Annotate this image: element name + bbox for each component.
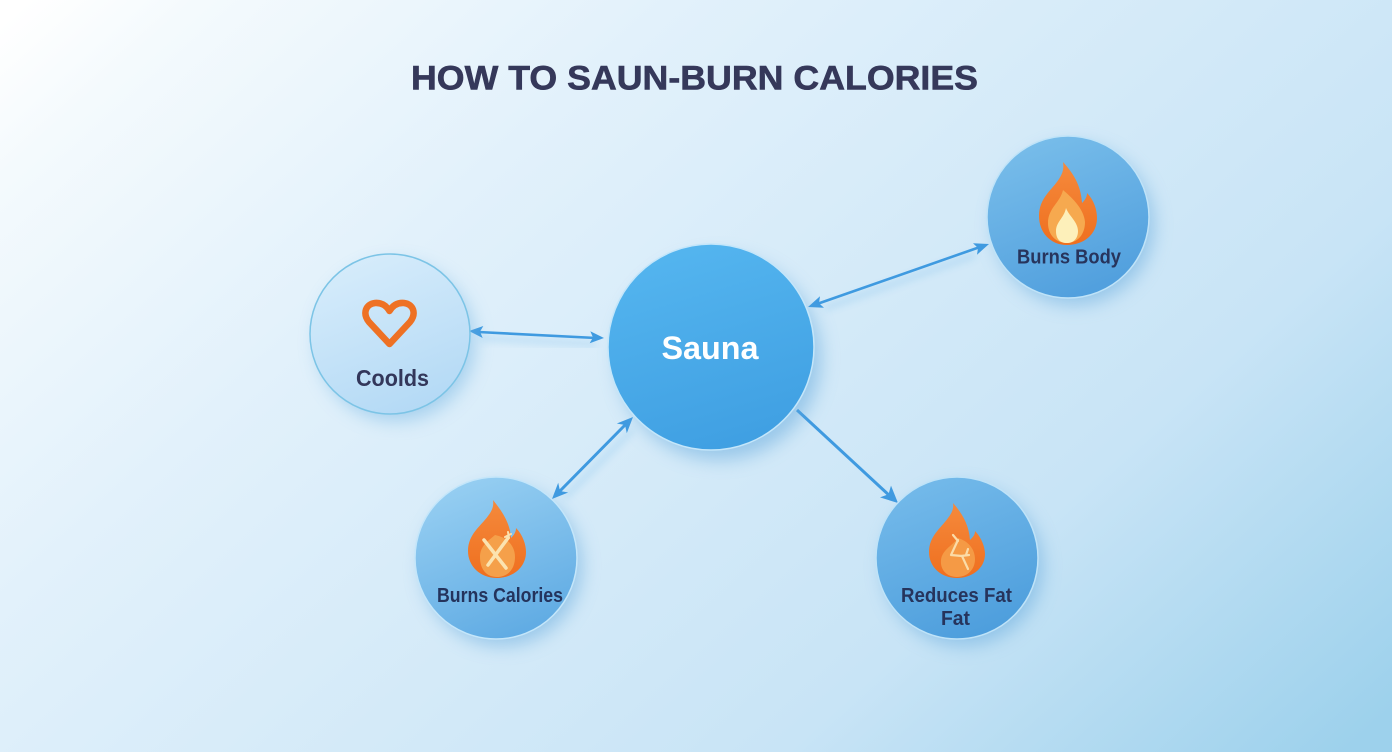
label: Reduces Fat Fat: Fat: [941, 608, 970, 630]
node: Reduces Fat: [876, 477, 1043, 646]
label: Sauna: Sauna: [662, 330, 759, 366]
arrow: Sauna to Burns Body: [808, 243, 989, 308]
icon: flame with crossed bones: [468, 500, 526, 578]
icon: flame: [1039, 162, 1097, 245]
arrow: Sauna to Reduces Fat: [797, 410, 898, 503]
node: Coolds: [310, 254, 475, 421]
arrow: Coolds to Sauna: [469, 326, 604, 344]
label: Burns Calories: Burns Calories: [437, 585, 563, 607]
icon: flame with cracks: [929, 503, 985, 578]
arrow: Sauna to Burns Calories: [552, 417, 633, 499]
label: Reduces Fat Fat: Reduces Fat: [901, 585, 1012, 607]
title: HOW TO SAUN-BURN CALORIES: [411, 60, 978, 98]
icon: heart: [365, 303, 414, 344]
node: Burns Body: [987, 136, 1154, 305]
label: Reduces Fat Fat: [901, 585, 1012, 630]
node: Sauna: [608, 244, 821, 460]
label: Burns Body: Burns Body: [1017, 246, 1122, 268]
node: Burns Calories: [415, 477, 582, 646]
label: Coolds: Coolds: [356, 365, 429, 391]
